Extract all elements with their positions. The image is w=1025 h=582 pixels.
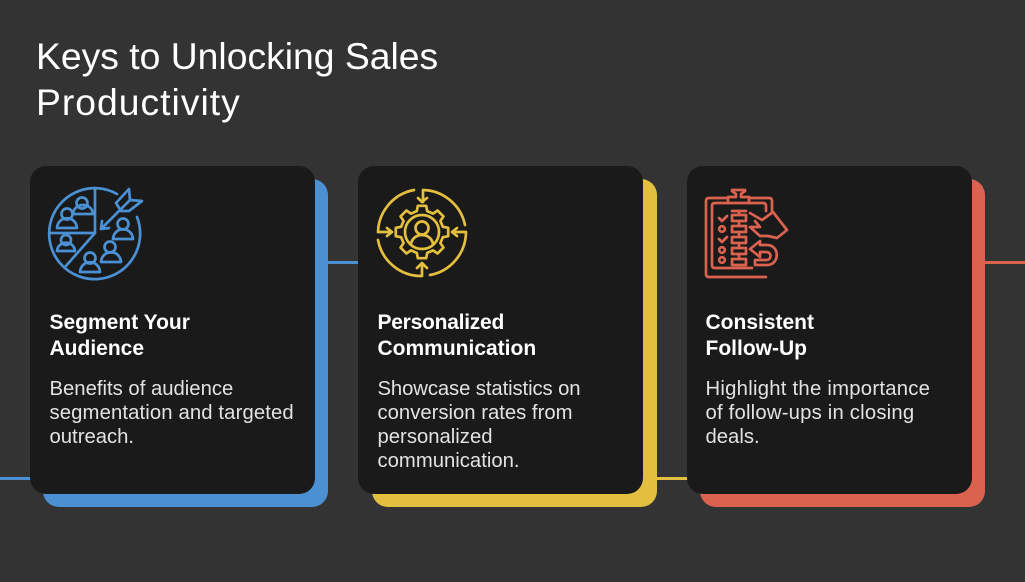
- icon: segmented pie with target arrow: [48, 186, 144, 280]
- panel backing: blue: [43, 179, 328, 507]
- text: segment description: [50, 378, 294, 448]
- text: personalized description: communication.: [378, 450, 520, 472]
- heading: personalized communication: Communication: [378, 337, 536, 360]
- heading: personalized communication: [378, 311, 536, 360]
- text: segment description: Benefits of audience: [50, 378, 233, 400]
- text: segment description: segmentation and targeted: [50, 402, 294, 424]
- text: personalized description: [378, 378, 580, 472]
- connector: left blue: [0, 477, 32, 480]
- panel: consistent follow-up: [687, 166, 972, 494]
- heading: segment your audience: Segment Your: [50, 311, 190, 334]
- title: Productivity: [36, 81, 241, 123]
- text: follow-up description: Highlight the importance: [706, 378, 930, 400]
- heading: consistent follow-up: Follow-Up: [706, 337, 807, 360]
- title: Keys to Unlocking Sales: [36, 35, 438, 77]
- text: personalized description: conversion rates from: [378, 402, 572, 424]
- panel: segment your audience: [30, 166, 315, 494]
- connector: yellow to red: [655, 477, 689, 480]
- text: personalized description: personalized: [378, 426, 493, 448]
- panel backing: yellow: [372, 179, 657, 507]
- text: personalized description: Showcase statistics on: [378, 378, 580, 400]
- heading: segment your audience: Audience: [50, 337, 144, 360]
- heading: consistent follow-up: Consistent: [706, 311, 814, 334]
- text: segment description: outreach.: [50, 426, 134, 448]
- heading: personalized communication: Personalized: [378, 311, 504, 334]
- heading: consistent follow-up: [706, 311, 814, 360]
- text: follow-up description: [706, 378, 930, 448]
- text: follow-up description: of follow-ups in closing: [706, 402, 914, 424]
- title: [36, 35, 438, 123]
- text: follow-up description: deals.: [706, 426, 760, 448]
- icon: clipboard with hand and return arrow: [704, 188, 788, 278]
- heading: segment your audience: [50, 311, 190, 360]
- icon: gear with person and arrows: [376, 188, 468, 278]
- panel: personalized communication: [358, 166, 643, 494]
- panel backing: red: [700, 179, 985, 507]
- connector: right red: [983, 261, 1025, 264]
- connector: blue to yellow: [326, 261, 360, 264]
